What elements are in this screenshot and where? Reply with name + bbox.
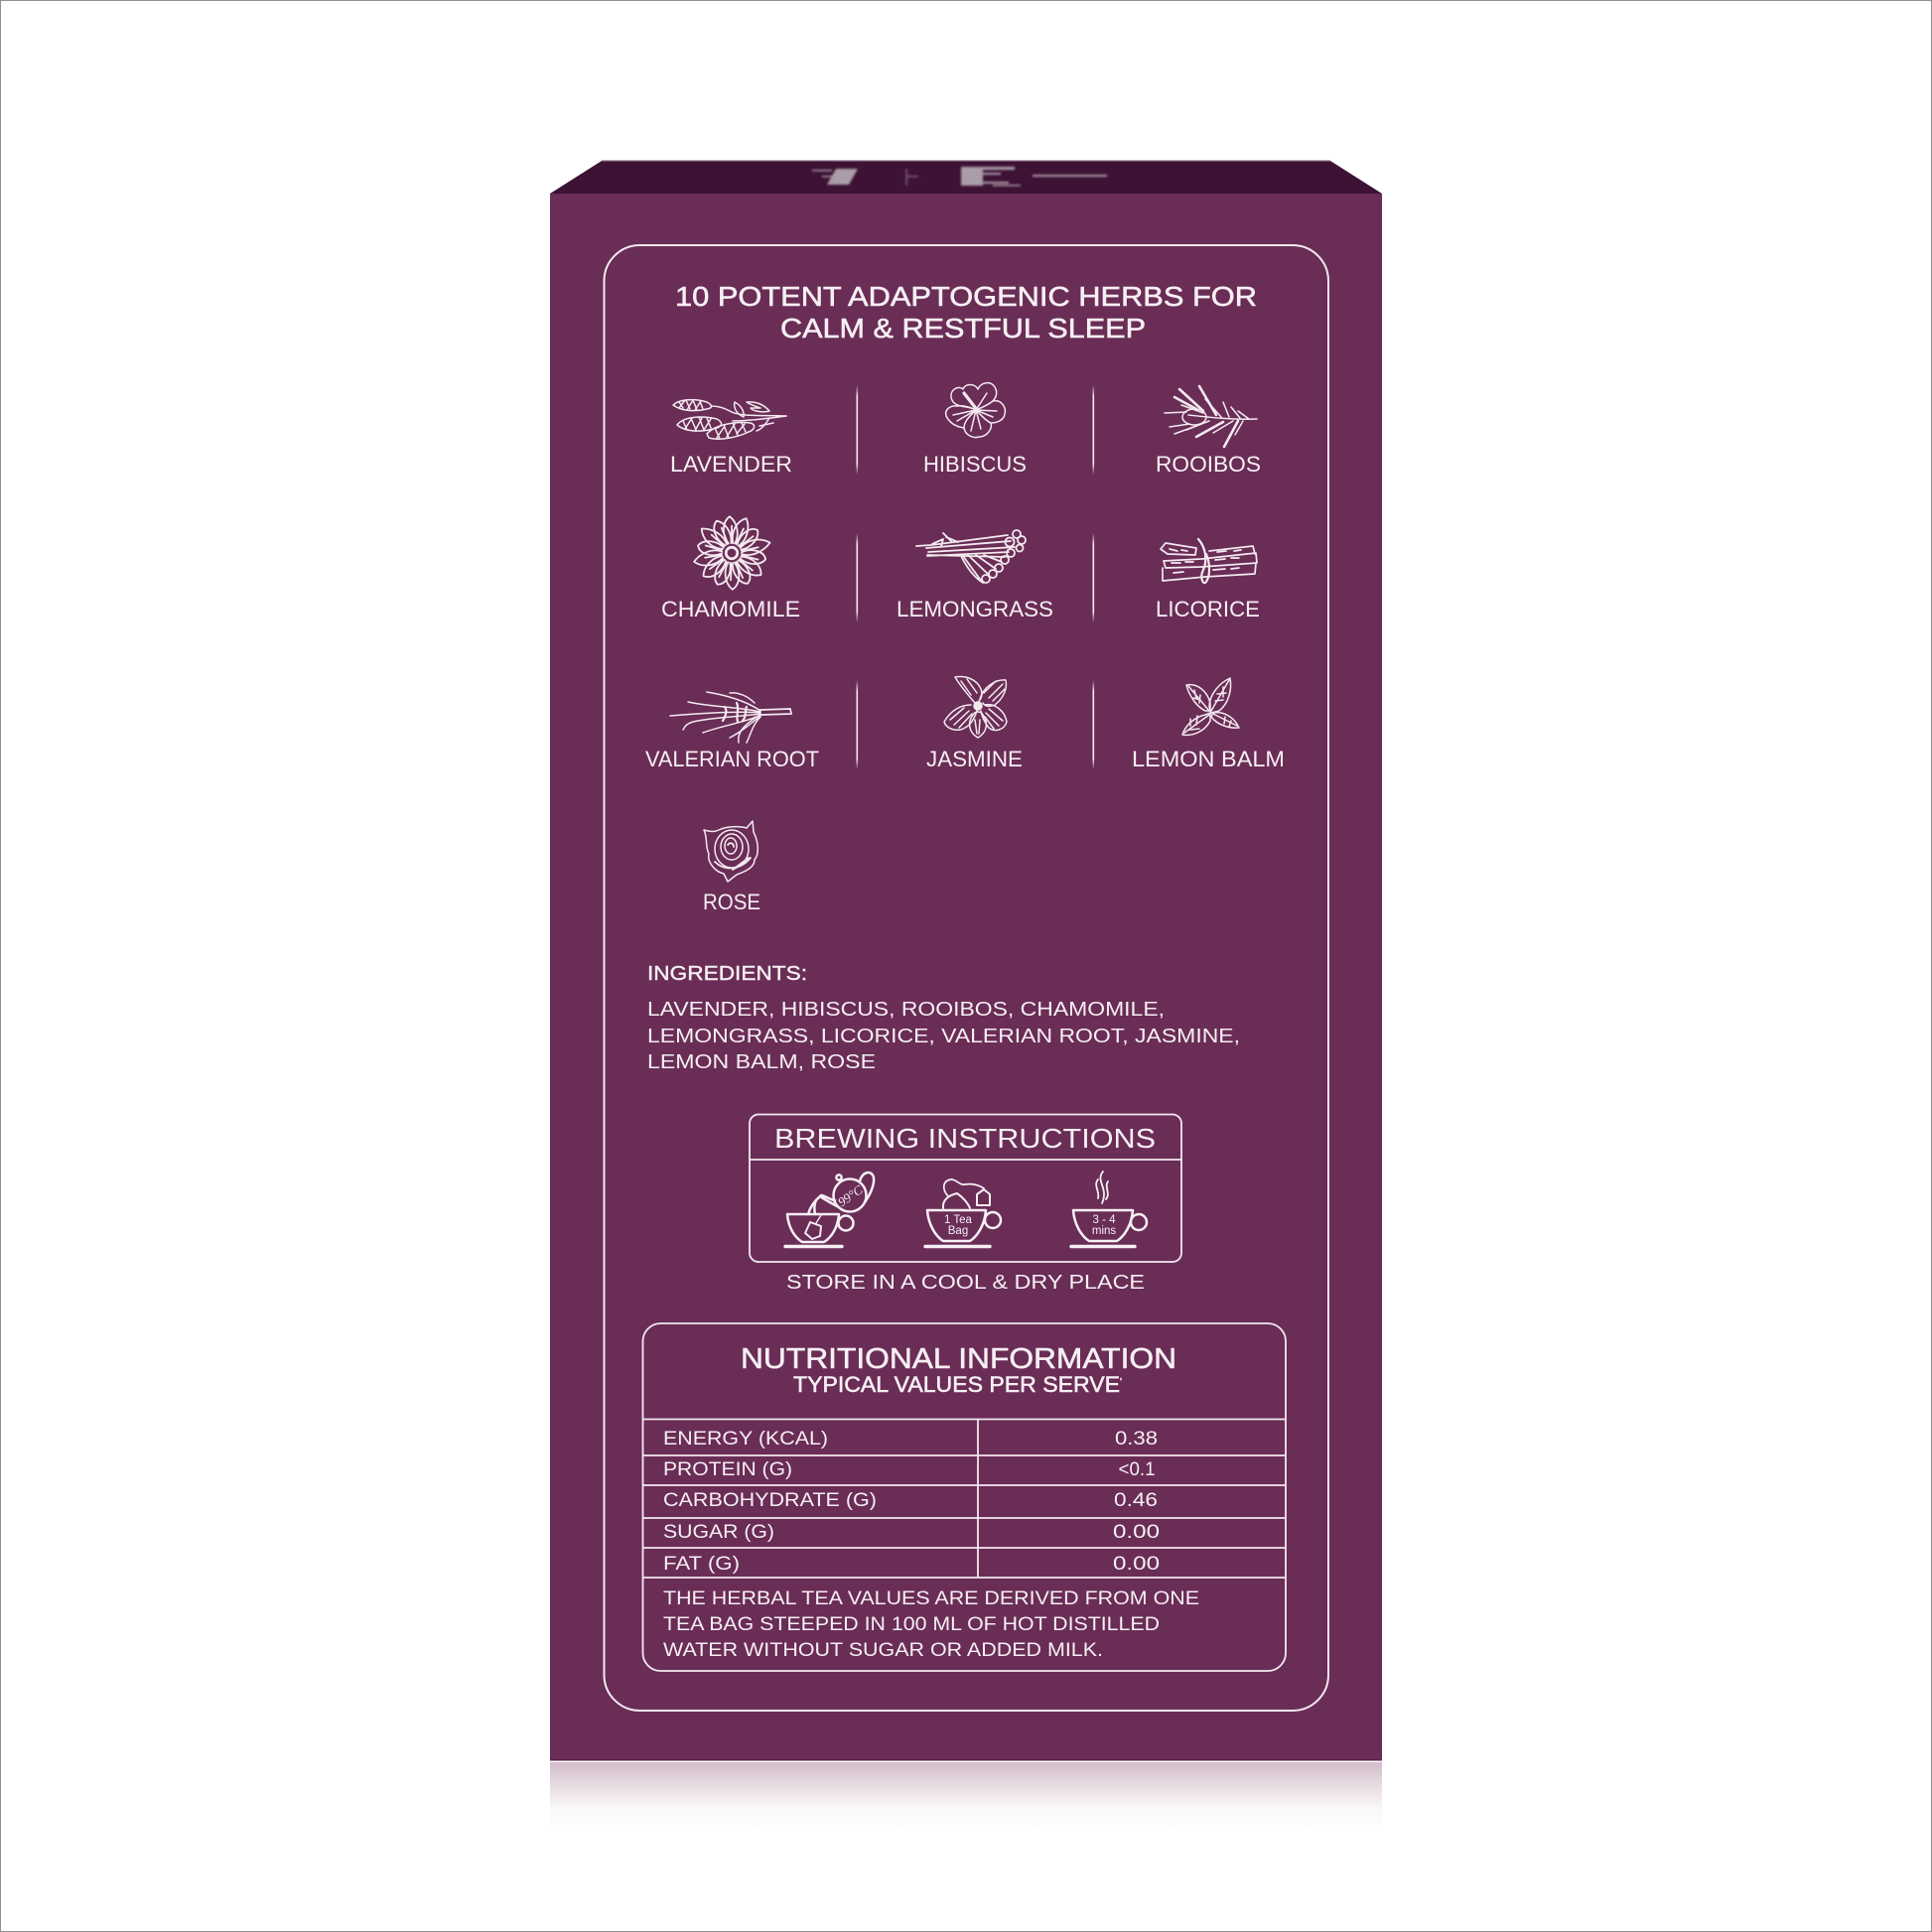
icon: lemon balm — [1182, 678, 1239, 735]
heading: CALM & RESTFUL SLEEP — [780, 313, 1146, 344]
nutrition table: SUGAR (G) — [663, 1522, 774, 1543]
outer rounded frame — [604, 245, 1328, 1711]
nutrition table: CARBOHYDRATE (G) — [663, 1490, 877, 1511]
nutrition heading: NUTRITIONAL INFORMATION — [741, 1343, 1176, 1375]
grid dividers — [856, 385, 858, 475]
icon: tea bag in cup: Bag — [948, 1225, 968, 1237]
nutrition table: FAT (G) — [663, 1554, 740, 1575]
nutrition footnote: TEA BAG STEEPED IN 100 ML OF HOT DISTILLED — [663, 1614, 1160, 1635]
nutrition footnote: THE HERBAL TEA VALUES ARE DERIVED FROM ONE — [663, 1588, 1199, 1609]
nutrition table — [643, 1420, 1286, 1578]
nutrition table: 0.00 — [1113, 1554, 1160, 1575]
icon: tea bag in cup — [925, 1179, 1001, 1247]
nutrition table: PROTEIN (G) — [663, 1459, 792, 1480]
nutrition table: <0.1 — [1118, 1459, 1156, 1480]
brewing heading: BREWING INSTRUCTIONS — [774, 1123, 1156, 1154]
label: lavender: LAVENDER — [670, 452, 792, 477]
nutrition subheading: ' — [1120, 1377, 1122, 1388]
storage note: STORE IN A COOL & DRY PLACE — [786, 1272, 1145, 1294]
label: valerian root: VALERIAN ROOT — [645, 747, 819, 771]
icon: jasmine — [944, 677, 1007, 738]
icon: steaming cup: mins — [1092, 1225, 1116, 1237]
nutrition table: 0.38 — [1115, 1429, 1158, 1449]
icon: rose — [704, 821, 758, 882]
heading: 10 POTENT ADAPTOGENIC HERBS FOR — [675, 281, 1257, 312]
label: rooibos: ROOIBOS — [1156, 452, 1261, 477]
nutrition table: 0.00 — [1113, 1522, 1160, 1543]
reflection below box — [550, 1762, 1382, 1832]
nutrition subheading: TYPICAL VALUES PER SERVE — [793, 1372, 1105, 1397]
icon: chamomile — [693, 515, 771, 590]
panel: brewing instructions — [750, 1114, 1181, 1262]
icon: steaming cup: 3 - 4 — [1092, 1214, 1116, 1226]
icon: lavender — [673, 400, 786, 439]
ingredients list: LEMONGRASS, LICORICE, VALERIAN ROOT, JASMINE, — [647, 1025, 1240, 1047]
label: hibiscus: HIBISCUS — [923, 452, 1027, 477]
nutrition footnote: WATER WITHOUT SUGAR OR ADDED MILK. — [663, 1640, 1103, 1661]
icon: rooibos — [1165, 386, 1257, 447]
icon: lemongrass — [916, 530, 1026, 583]
label: lemongrass: LEMONGRASS — [897, 597, 1053, 621]
ingredients list — [647, 998, 1240, 1073]
box top face — [550, 161, 1382, 194]
label: lemon balm: LEMON BALM — [1132, 747, 1285, 771]
icon: licorice — [1161, 539, 1257, 583]
icon: hibiscus — [946, 383, 1005, 438]
icon: steaming cup — [1071, 1172, 1147, 1247]
label: jasmine: JASMINE — [926, 747, 1023, 771]
ingredients list: LEMON BALM, ROSE — [647, 1050, 876, 1073]
icon: valerian root — [670, 692, 791, 743]
label: licorice: LICORICE — [1156, 597, 1260, 621]
icon: teapot pouring into cup — [785, 1173, 874, 1247]
ingredients heading: INGREDIENTS: — [647, 962, 807, 985]
icon: tea bag in cup: 1 Tea — [944, 1214, 973, 1226]
nutrition table: 0.46 — [1114, 1490, 1158, 1511]
heading — [675, 281, 1257, 344]
panel: nutritional information — [643, 1323, 1286, 1671]
nutrition table: ENERGY (KCAL) — [663, 1429, 828, 1449]
ingredients list: LAVENDER, HIBISCUS, ROOIBOS, CHAMOMILE, — [647, 998, 1165, 1021]
nutrition footnote — [663, 1588, 1199, 1661]
icon: teapot pouring into cup: 99°C — [835, 1181, 866, 1209]
box front panel — [550, 194, 1382, 1761]
label: rose: ROSE — [703, 890, 760, 914]
blurred top flap print — [812, 167, 1107, 187]
label: chamomile: CHAMOMILE — [661, 597, 800, 621]
